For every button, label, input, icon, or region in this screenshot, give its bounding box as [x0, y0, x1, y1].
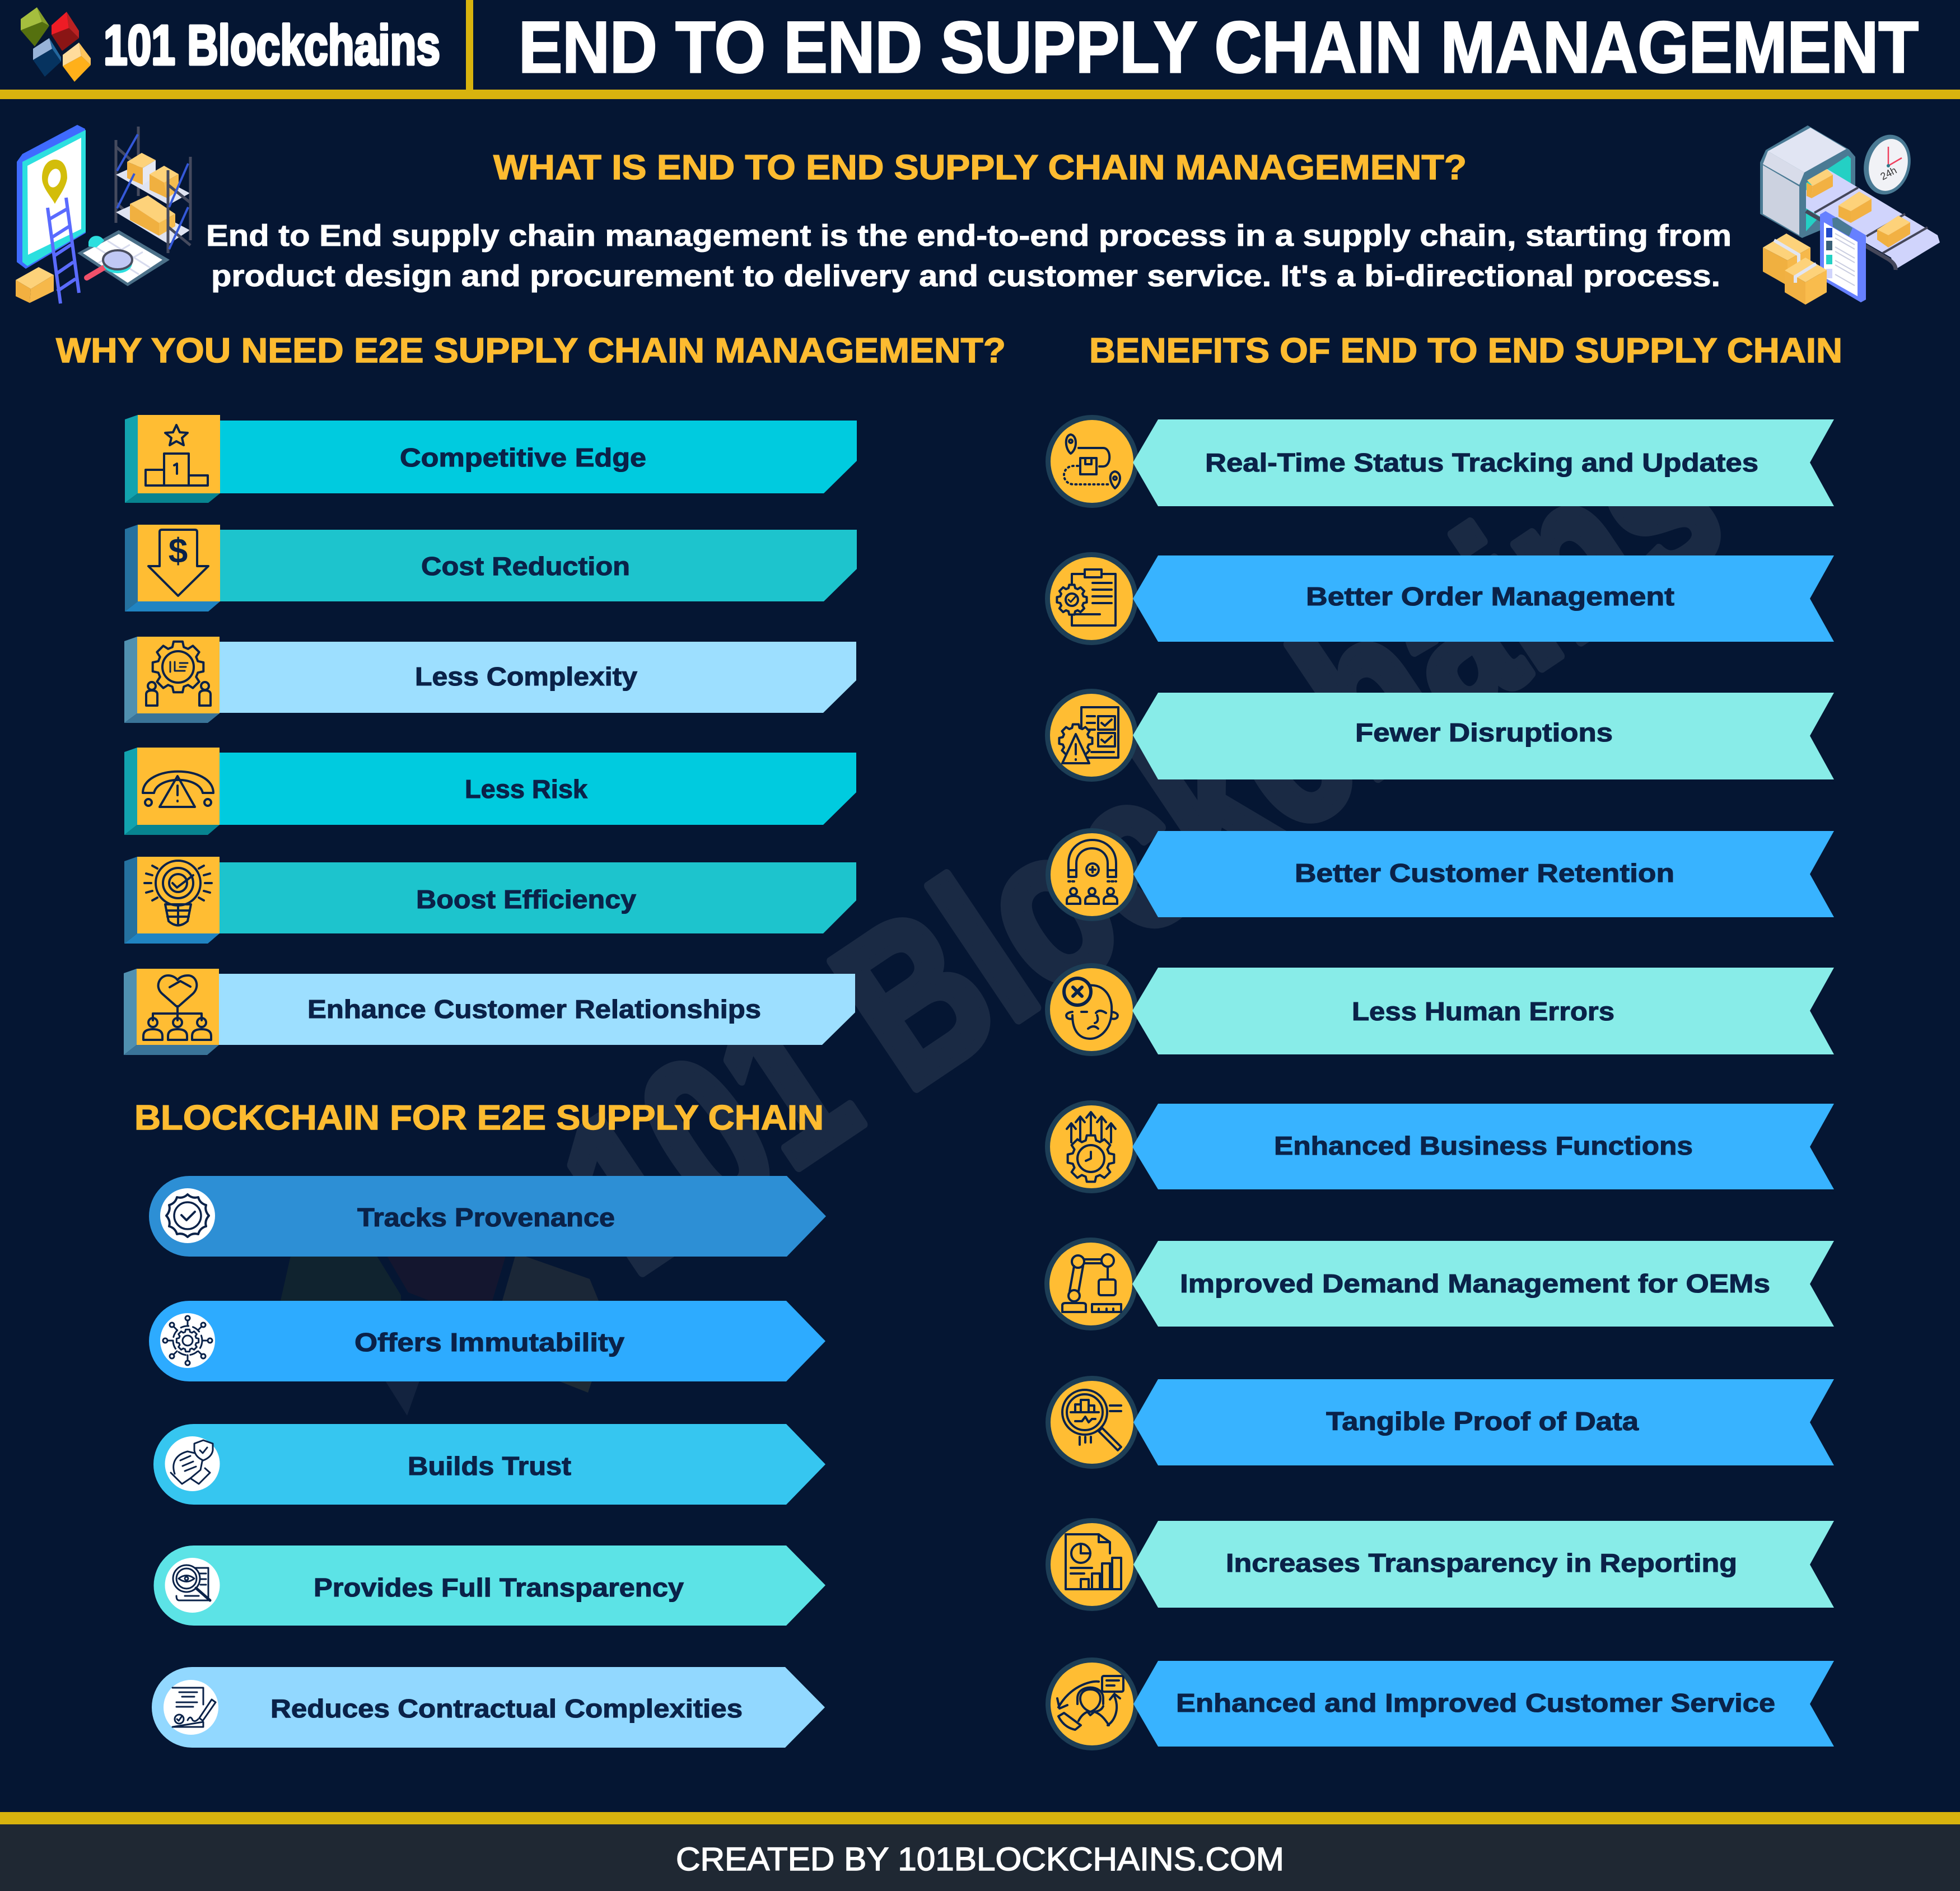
icon: report with pie and bars: [1066, 1534, 1121, 1589]
intro paragraph: [206, 219, 1732, 293]
panel: pill tracks provenance: [149, 1176, 826, 1257]
icon: magnet attracting people: [1067, 840, 1117, 904]
panel: benefit 3 fewer disruptions: [1045, 689, 1834, 782]
icon: podium with star: [146, 425, 208, 485]
heading: why you need E2E supply chain management: WHY YOU NEED E2E SUPPLY CHAIN MANAGEMENT?: [56, 331, 1006, 370]
panel: why bar 3 less complexity: [124, 637, 856, 723]
icon: route with package: [1064, 435, 1120, 488]
label: Increases Transparency in Reporting: [1226, 1548, 1737, 1577]
icon: 101 Blockchains logo cubes: [21, 7, 91, 82]
panel: why bar 2 cost reduction: [125, 525, 857, 611]
panel: why bar 5 boost efficiency: [124, 857, 856, 944]
label: Less Risk: [465, 774, 587, 804]
illustration: conveyor machine, clock and boxes: 24h: [1878, 165, 1898, 183]
logo wordmark: 101 Blockchains: [104, 14, 440, 77]
label: Tangible Proof of Data: [1326, 1407, 1639, 1436]
panel: why bar 1 competitive edge: [125, 415, 857, 503]
heading: what is end to end supply chain management: WHAT IS END TO END SUPPLY CHAIN MANAGEMENT?: [493, 148, 1467, 187]
icon: contract with pen: [172, 1688, 216, 1727]
panel: pill offers immutability: [149, 1301, 825, 1381]
icon: checklist with warning gear: [1059, 707, 1118, 763]
icon: gauge with warning: [143, 772, 213, 807]
label: Competitive Edge: [400, 443, 646, 472]
panel: why bar 4 less risk: [124, 748, 856, 835]
panel: benefit 4 better customer retention: [1046, 828, 1834, 921]
label: Real-Time Status Tracking and Updates: [1205, 448, 1758, 477]
label: Enhanced Business Functions: [1274, 1131, 1693, 1160]
panel: benefit 2 better order management: [1045, 552, 1834, 645]
icon: support agent with phone and chat: [1057, 1676, 1123, 1730]
icon: arrow down with dollar: $: [169, 532, 188, 571]
footer text: CREATED BY 101BLOCKCHAINS.COM: [676, 1841, 1284, 1878]
icon: magnifier with chart: [1062, 1390, 1121, 1450]
icon: badge with check: [166, 1194, 209, 1237]
panel: pill builds trust: [153, 1424, 825, 1505]
panel: pill reduces contractual complexities: [152, 1667, 825, 1748]
panel: benefit 6 enhanced business functions: [1045, 1100, 1834, 1193]
watermark: faint logo cubes: [278, 1204, 603, 1416]
panel: benefit 7 improved demand management: [1044, 1238, 1834, 1330]
label: Less Human Errors: [1352, 997, 1614, 1026]
icon: face with error mark: [1064, 978, 1118, 1039]
header: top band: [0, 0, 1960, 99]
panel: why bar 6 enhance customer relationships: [124, 969, 855, 1055]
footer band: [0, 1812, 1960, 1891]
label: Fewer Disruptions: [1355, 718, 1613, 747]
panel: benefit 8 tangible proof of data: [1046, 1376, 1834, 1469]
icon: clipboard with gear: [1057, 569, 1116, 625]
heading: blockchain for E2E supply chain: BLOCKCHAIN FOR E2E SUPPLY CHAIN: [134, 1099, 824, 1137]
label: Cost Reduction: [421, 552, 630, 581]
panel: benefit 9 increases transparency in reporting: [1046, 1518, 1834, 1611]
panel: benefit 5 less human errors: [1045, 963, 1834, 1056]
icon: gear clock with arrows: [1067, 1112, 1116, 1182]
label: Tracks Provenance: [357, 1203, 615, 1232]
icon: handshake and people: [143, 975, 211, 1040]
icon: bulb with target check: [144, 861, 212, 925]
panel: benefit 1 real-time tracking: [1046, 415, 1834, 508]
label: Boost Efficiency: [416, 885, 636, 914]
panel: benefit 10 customer service: [1046, 1657, 1834, 1750]
icon: gear with people: [146, 642, 211, 706]
panel: pill provides full transparency: [153, 1546, 825, 1626]
label: Better Order Management: [1306, 582, 1674, 611]
illustration: conveyor machine, clock and boxes: [1760, 125, 1940, 305]
label: Enhanced and Improved Customer Service: [1176, 1688, 1775, 1717]
label: Builds Trust: [408, 1451, 571, 1481]
illustration: tablet, shelves and clipboard: [16, 125, 190, 304]
icon: magnifier with eye and document: [173, 1565, 210, 1600]
icon: robot arm and pallet: [1062, 1254, 1121, 1312]
icon: arrow down with dollar: [148, 530, 208, 596]
icon: handshake with shield: [171, 1440, 213, 1484]
intro paragraph: End to End supply chain management is the end-to-end process in a supply chain, starting from: [206, 219, 1732, 253]
label: Offers Immutability: [354, 1328, 624, 1357]
label: Reduces Contractual Complexities: [270, 1694, 743, 1723]
icon: network gear: [163, 1316, 212, 1365]
heading: benefits of end to end supply chain: BENEFITS OF END TO END SUPPLY CHAIN: [1089, 331, 1842, 370]
label: Improved Demand Management for OEMs: [1180, 1269, 1770, 1298]
intro paragraph: product design and procurement to delivery and customer service. It's a bi-directional process.: [211, 259, 1720, 293]
label: Enhance Customer Relationships: [307, 994, 761, 1024]
label: Better Customer Retention: [1295, 858, 1674, 888]
label: Provides Full Transparency: [314, 1573, 684, 1602]
label: Less Complexity: [415, 662, 637, 691]
